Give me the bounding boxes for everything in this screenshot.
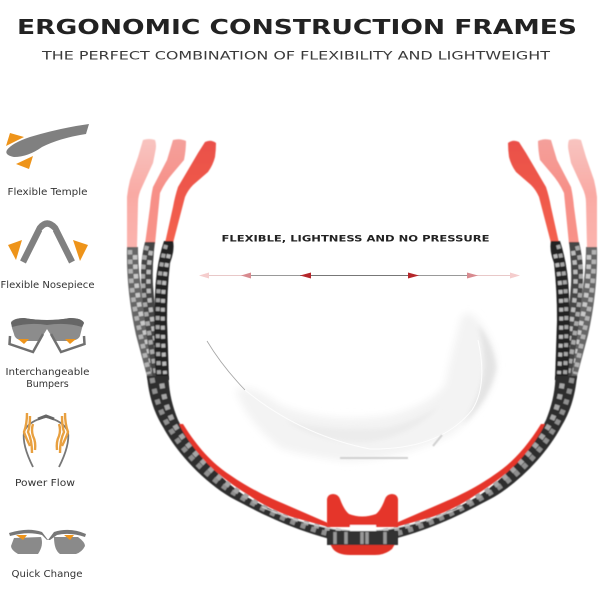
icon: power flow bbox=[24, 413, 68, 467]
subtitle: THE PERFECT COMBINATION OF FLEXIBILITY AND LIGHTWEIGHT bbox=[41, 48, 551, 62]
frame: lower rim bbox=[147, 376, 577, 546]
left temples bbox=[127, 139, 216, 380]
nose piece bbox=[327, 494, 398, 555]
icon: flexible temple bbox=[6, 124, 89, 169]
label: interchangeable bumpers: Bumpers bbox=[26, 379, 69, 390]
illustration: feather bbox=[207, 313, 497, 461]
callout text: FLEXIBLE, LIGHTNESS AND NO PRESSURE bbox=[222, 234, 490, 244]
icon: flexible nosepiece bbox=[8, 224, 88, 262]
label: flexible nosepiece: Flexible Nosepiece bbox=[0, 280, 95, 291]
icon: interchangeable bumpers bbox=[10, 318, 84, 352]
label: power flow: Power Flow bbox=[15, 478, 75, 489]
icon: quick change bbox=[9, 530, 86, 554]
arrow: flex range bbox=[199, 272, 520, 278]
right temples bbox=[508, 139, 597, 380]
label: quick change: Quick Change bbox=[12, 569, 83, 580]
label: flexible temple: Flexible Temple bbox=[8, 187, 88, 198]
label: interchangeable bumpers bbox=[6, 367, 90, 390]
label: interchangeable bumpers: Interchangeable bbox=[6, 367, 90, 378]
title: ERGONOMIC CONSTRUCTION FRAMES bbox=[17, 15, 577, 39]
